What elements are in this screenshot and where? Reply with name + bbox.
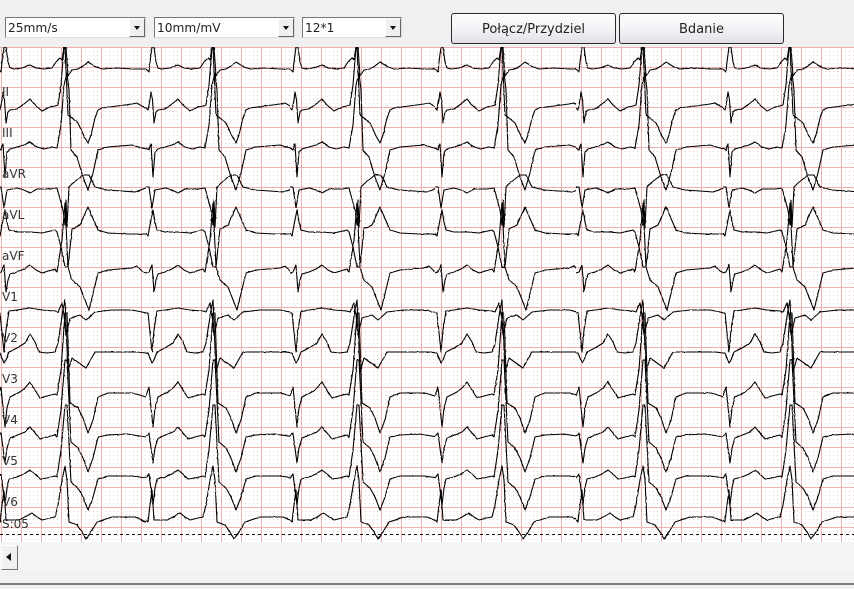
lead V2 trace — [0, 300, 854, 372]
lead V4 trace — [0, 360, 854, 472]
lead labels: V6 — [2, 495, 18, 509]
button: Połącz/Przydziel: Połącz/Przydziel — [482, 22, 585, 37]
lead III trace — [0, 73, 854, 190]
baseline dashed reference — [0, 534, 854, 535]
dropdown: gain 10mm/mV: 10mm/mV — [157, 21, 221, 35]
lead labels: V1 — [2, 290, 18, 304]
lead labels: aVF — [2, 249, 25, 263]
lead labels: aVL — [2, 208, 25, 222]
lead labels: III — [2, 126, 13, 140]
lead V5 trace — [0, 405, 854, 510]
lead labels: V3 — [2, 372, 18, 386]
status strip — [0, 571, 854, 583]
button: Połącz/Przydziel — [451, 13, 616, 44]
lead labels: V2 — [2, 331, 18, 345]
button: Bdanie: Bdanie — [679, 22, 724, 37]
lead V1 trace — [0, 303, 854, 352]
lead aVR trace — [0, 175, 854, 227]
lead V6 trace — [0, 466, 854, 539]
dropdown: layout 12*1 — [302, 17, 402, 38]
lead labels: II — [2, 85, 9, 99]
lead V3 trace — [0, 313, 854, 433]
lead II trace — [0, 47, 854, 143]
scroll left button — [1, 545, 18, 570]
dropdown: layout 12*1: 12*1 — [305, 21, 334, 35]
bottom divider — [0, 583, 854, 585]
button: Bdanie — [619, 13, 784, 44]
lead aVL trace — [0, 207, 854, 267]
lead I trace — [0, 47, 854, 76]
lead labels: V4 — [2, 413, 18, 427]
dropdown: speed 25mm/s — [5, 17, 146, 38]
dropdown: speed 25mm/s: 25mm/s — [8, 21, 58, 35]
toolbar — [0, 0, 854, 47]
dropdown: gain 10mm/mV — [154, 17, 295, 38]
lead aVF trace — [0, 203, 854, 310]
lead labels: V5 — [2, 454, 18, 468]
lead labels: S:05 — [2, 517, 29, 531]
lead labels — [2, 42, 29, 531]
scrollbar — [0, 542, 854, 571]
lead labels: aVR — [2, 167, 26, 181]
